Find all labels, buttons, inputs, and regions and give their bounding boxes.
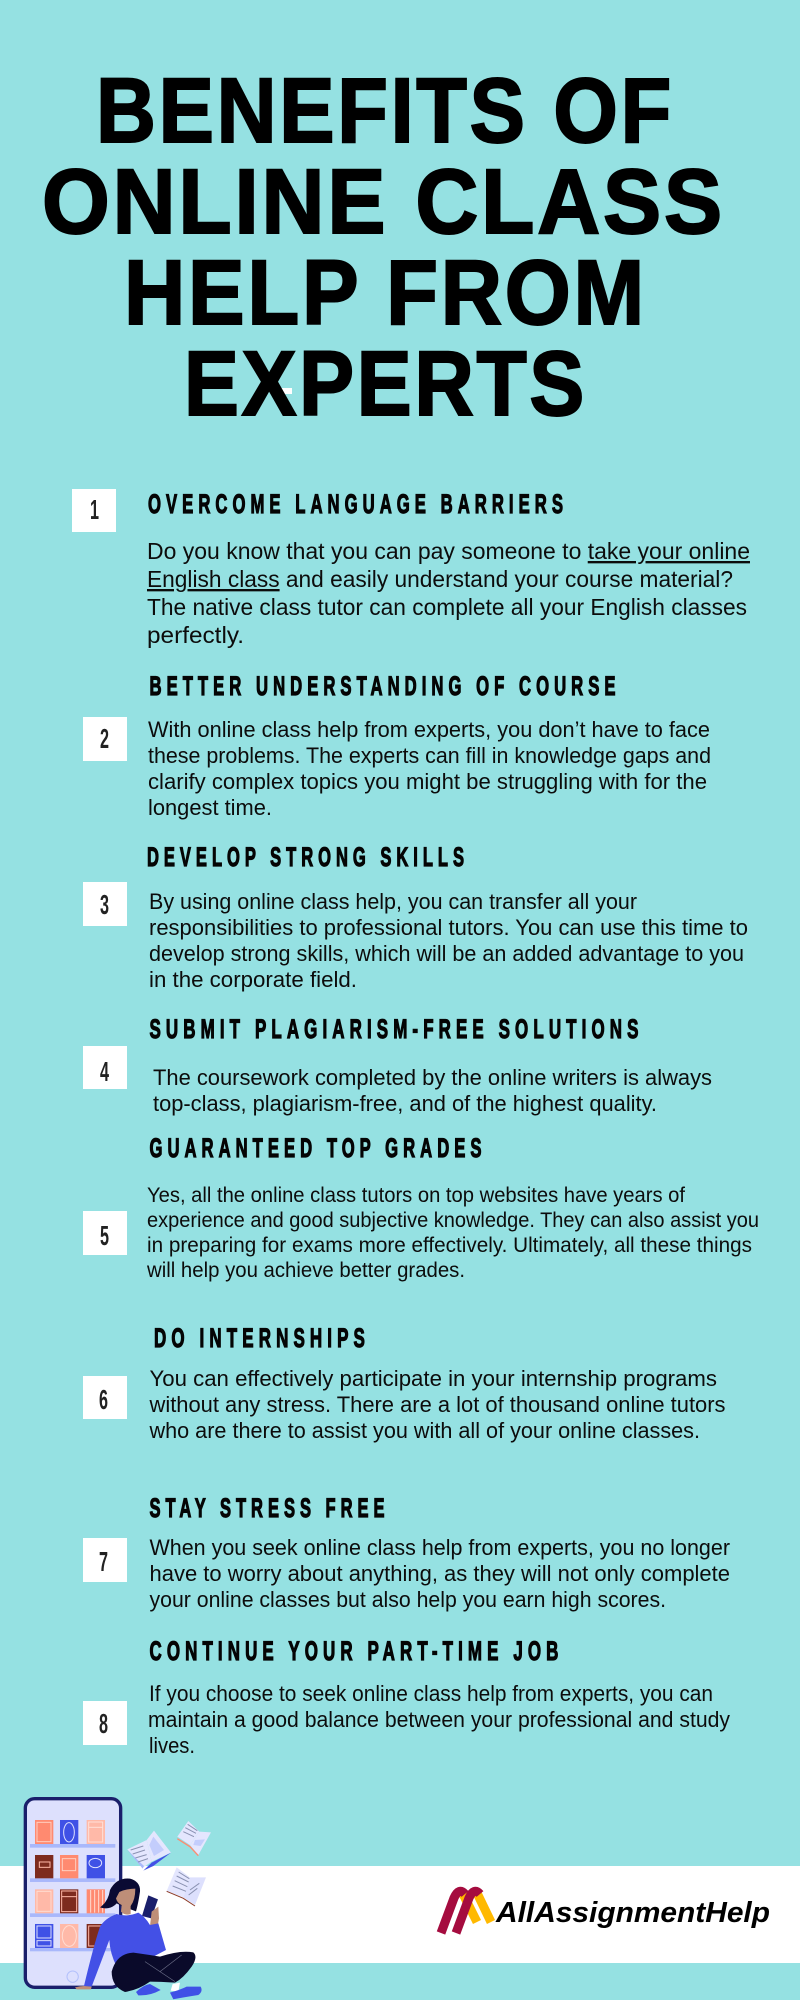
number badge 6: [83, 1376, 127, 1419]
body text 7: When you seek online class help from experts, you no longer: [150, 1535, 730, 1560]
body text 2: With online class help from experts, you don’t have to face: [148, 717, 710, 742]
body text 3: responsibilities to professional tutors. You can use this time to: [149, 915, 748, 940]
number badge 8: 8: [99, 1708, 108, 1739]
footer white band: [0, 1866, 800, 1963]
item 6: do internships: [83, 1323, 726, 1443]
item 4: submit plagiarism-free solutions: [83, 1014, 712, 1116]
body text 8: lives.: [149, 1733, 195, 1758]
body text 8: maintain a good balance between your professional and study: [148, 1707, 730, 1732]
body text 5: Yes, all the online class tutors on top websites have years of: [147, 1184, 685, 1207]
heading 5: GUARANTEED TOP GRADES: [150, 1133, 486, 1163]
body text 8: [148, 1681, 730, 1758]
heading 7: STAY STRESS FREE: [150, 1493, 390, 1523]
heading 3: DEVELOP STRONG SKILLS: [147, 842, 469, 872]
body text 1: English class and easily understand your course material?: [147, 566, 733, 592]
number badge 2: 2: [100, 723, 109, 754]
body text 4: [153, 1065, 712, 1116]
body text 1: The native class tutor can complete all your English classes: [147, 594, 747, 620]
body text 1: [147, 538, 750, 648]
body text 4: The coursework completed by the online writers is always: [153, 1065, 712, 1090]
body text 4: top-class, plagiarism-free, and of the highest quality.: [153, 1091, 657, 1116]
item 5: guaranteed top grades: [83, 1133, 759, 1282]
number badge 3: 3: [100, 889, 109, 920]
student figure: [75, 1879, 202, 1999]
number badge 1: [72, 489, 116, 532]
body text 3: in the corporate field.: [149, 967, 357, 992]
body text 7: your online classes but also help you earn high scores.: [150, 1587, 666, 1612]
body text 6: You can effectively participate in your internship programs: [150, 1366, 717, 1391]
heading 6: DO INTERNSHIPS: [154, 1323, 370, 1353]
body text 5: experience and good subjective knowledge. They can also assist you: [147, 1209, 759, 1232]
body text 1: perfectly.: [147, 622, 244, 648]
title: HELP FROM: [124, 242, 647, 344]
body text 6: without any stress. There are a lot of thousand online tutors: [149, 1392, 726, 1417]
phone with bookshelf: [25, 1799, 121, 1987]
body text 3: [149, 889, 748, 992]
body text 1: Do you know that you can pay someone to take your online: [147, 538, 750, 564]
logo wordmark: AllAssignmentHelp: [495, 1897, 770, 1929]
number badge 5: 5: [100, 1220, 109, 1251]
illustration: student reading beside phone bookshelf: [25, 1799, 211, 1999]
number badge 6: 6: [99, 1384, 108, 1415]
heading 1: OVERCOME LANGUAGE BARRIERS: [148, 489, 568, 519]
number badge 2: [83, 717, 127, 761]
body text 5: will help you achieve better grades.: [146, 1259, 465, 1282]
title: BENEFITS OF: [96, 60, 674, 162]
body text 5: [146, 1184, 759, 1282]
number badge 7: [83, 1538, 127, 1582]
item 3: develop strong skills: [83, 842, 748, 992]
body text 2: [148, 717, 711, 820]
item 1: overcome language barriers: [72, 489, 750, 648]
body text 2: clarify complex topics you might be struggling with for the: [148, 769, 707, 794]
body text 2: longest time.: [148, 795, 272, 820]
item 7: stay stress free: [83, 1493, 730, 1612]
body text 5: in preparing for exams more effectively. Ultimately, all these things: [147, 1234, 752, 1257]
body text 8: If you choose to seek online class help from experts, you can: [149, 1681, 713, 1706]
item 2: better understanding of course: [83, 671, 711, 820]
logo: AllAssignmentHelp: [441, 1891, 770, 1933]
body text 7: [150, 1535, 730, 1612]
body text 6: [149, 1366, 726, 1443]
number badge 1: 1: [90, 494, 99, 525]
body text 3: By using online class help, you can transfer all your: [149, 889, 637, 914]
number badge 4: [83, 1046, 127, 1089]
body text 2: these problems. The experts can fill in knowledge gaps and: [148, 743, 711, 768]
body text 3: develop strong skills, which will be an added advantage to you: [149, 941, 744, 966]
number badge 8: [83, 1701, 127, 1745]
heading 8: CONTINUE YOUR PART-TIME JOB: [150, 1636, 564, 1666]
title: [42, 60, 725, 435]
number badge 7: 7: [99, 1546, 108, 1577]
title: ONLINE CLASS: [42, 151, 725, 253]
open books: [127, 1821, 211, 1906]
logo mark: [441, 1891, 491, 1933]
number badge 3: [83, 882, 127, 926]
body text 7: have to worry about anything, as they will not only complete: [150, 1561, 730, 1586]
number badge 5: [83, 1211, 127, 1255]
title: EXPERTS: [184, 333, 587, 435]
body text 6: who are there to assist you with all of your online classes.: [149, 1418, 700, 1443]
number badge 4: 4: [100, 1056, 109, 1087]
item 8: continue your part-time job: [83, 1636, 730, 1758]
